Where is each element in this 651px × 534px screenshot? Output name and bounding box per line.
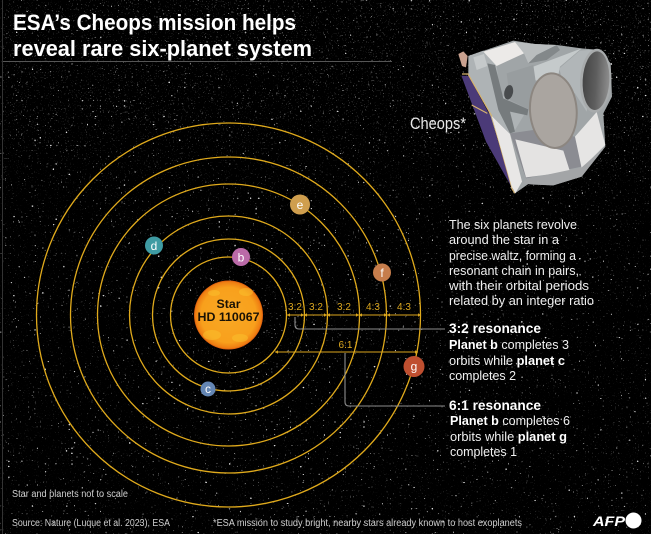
- planet e: [290, 194, 310, 214]
- planet g: g: [411, 360, 417, 374]
- text block: description: around the star in a: [449, 232, 560, 247]
- source: Source: Nature (Luque et al. 2023), ESA: [12, 518, 170, 529]
- text block: 6:1 resonance: orbits while planet g: [450, 429, 567, 444]
- resonance arrows and ratios: 3:2: [309, 302, 323, 313]
- AFP logo: AFP: [592, 513, 626, 529]
- resonance arrows and ratios: [275, 302, 421, 354]
- planet b: b: [238, 250, 245, 264]
- text block: 6:1 resonance: Planet b completes 6: [450, 413, 570, 428]
- title: ESA’s Cheops mission helps: [13, 10, 296, 35]
- text block: 6:1 resonance: completes 1: [450, 444, 517, 459]
- star HD 110067: [194, 280, 263, 350]
- text block: description: precise waltz, forming a: [449, 248, 577, 263]
- planet d: [145, 236, 163, 254]
- leader lines: [295, 317, 445, 406]
- planet f: f: [380, 266, 384, 280]
- title: [13, 10, 312, 61]
- text block: 3:2 resonance: 3:2 resonance: [449, 320, 541, 336]
- resonance arrows and ratios: 3:2: [288, 302, 302, 313]
- AFP logo: [592, 512, 642, 529]
- text block: 3:2 resonance: Planet b completes 3: [449, 337, 569, 352]
- planet b: [232, 248, 250, 266]
- text block: description: The six planets revolve: [449, 217, 577, 232]
- planet f: [373, 264, 391, 282]
- text block: 6:1 resonance: [449, 397, 570, 459]
- text block: description: with their orbital periods: [448, 278, 589, 293]
- planet c: c: [205, 382, 211, 396]
- star HD 110067: Star: [216, 299, 241, 311]
- star HD 110067: HD 110067: [198, 312, 260, 324]
- resonance arrows and ratios: 4:3: [397, 302, 411, 313]
- text block: description: related by an integer ratio: [449, 293, 594, 308]
- planet c: [200, 382, 216, 396]
- purple solar panel: [461, 76, 515, 193]
- text block: description: [448, 217, 594, 308]
- planet d: d: [151, 239, 157, 253]
- text block: 6:1 resonance: 6:1 resonance: [449, 397, 541, 413]
- text block: 3:2 resonance: orbits while planet c: [449, 353, 565, 368]
- scale note: Star and planets not to scale: [12, 489, 128, 500]
- text block: 3:2 resonance: completes 2: [449, 368, 516, 383]
- title: reveal rare six-planet system: [13, 36, 312, 61]
- orbit diagram: [36, 123, 420, 507]
- resonance arrows and ratios: 3:2: [337, 302, 351, 313]
- planet e: e: [297, 198, 304, 212]
- text block: description: resonant chain in pairs,: [449, 263, 579, 278]
- text block: 3:2 resonance: [449, 320, 569, 383]
- spacecraft illustration: Cheops: [458, 41, 613, 193]
- footnote: *ESA mission to study bright, nearby stars already known to host exoplanets: [213, 518, 522, 529]
- resonance arrows and ratios: 4:3: [366, 302, 380, 313]
- resonance arrows and ratios: 6:1: [339, 340, 353, 351]
- label: Cheops: Cheops*: [410, 114, 466, 133]
- planet g: [404, 356, 424, 377]
